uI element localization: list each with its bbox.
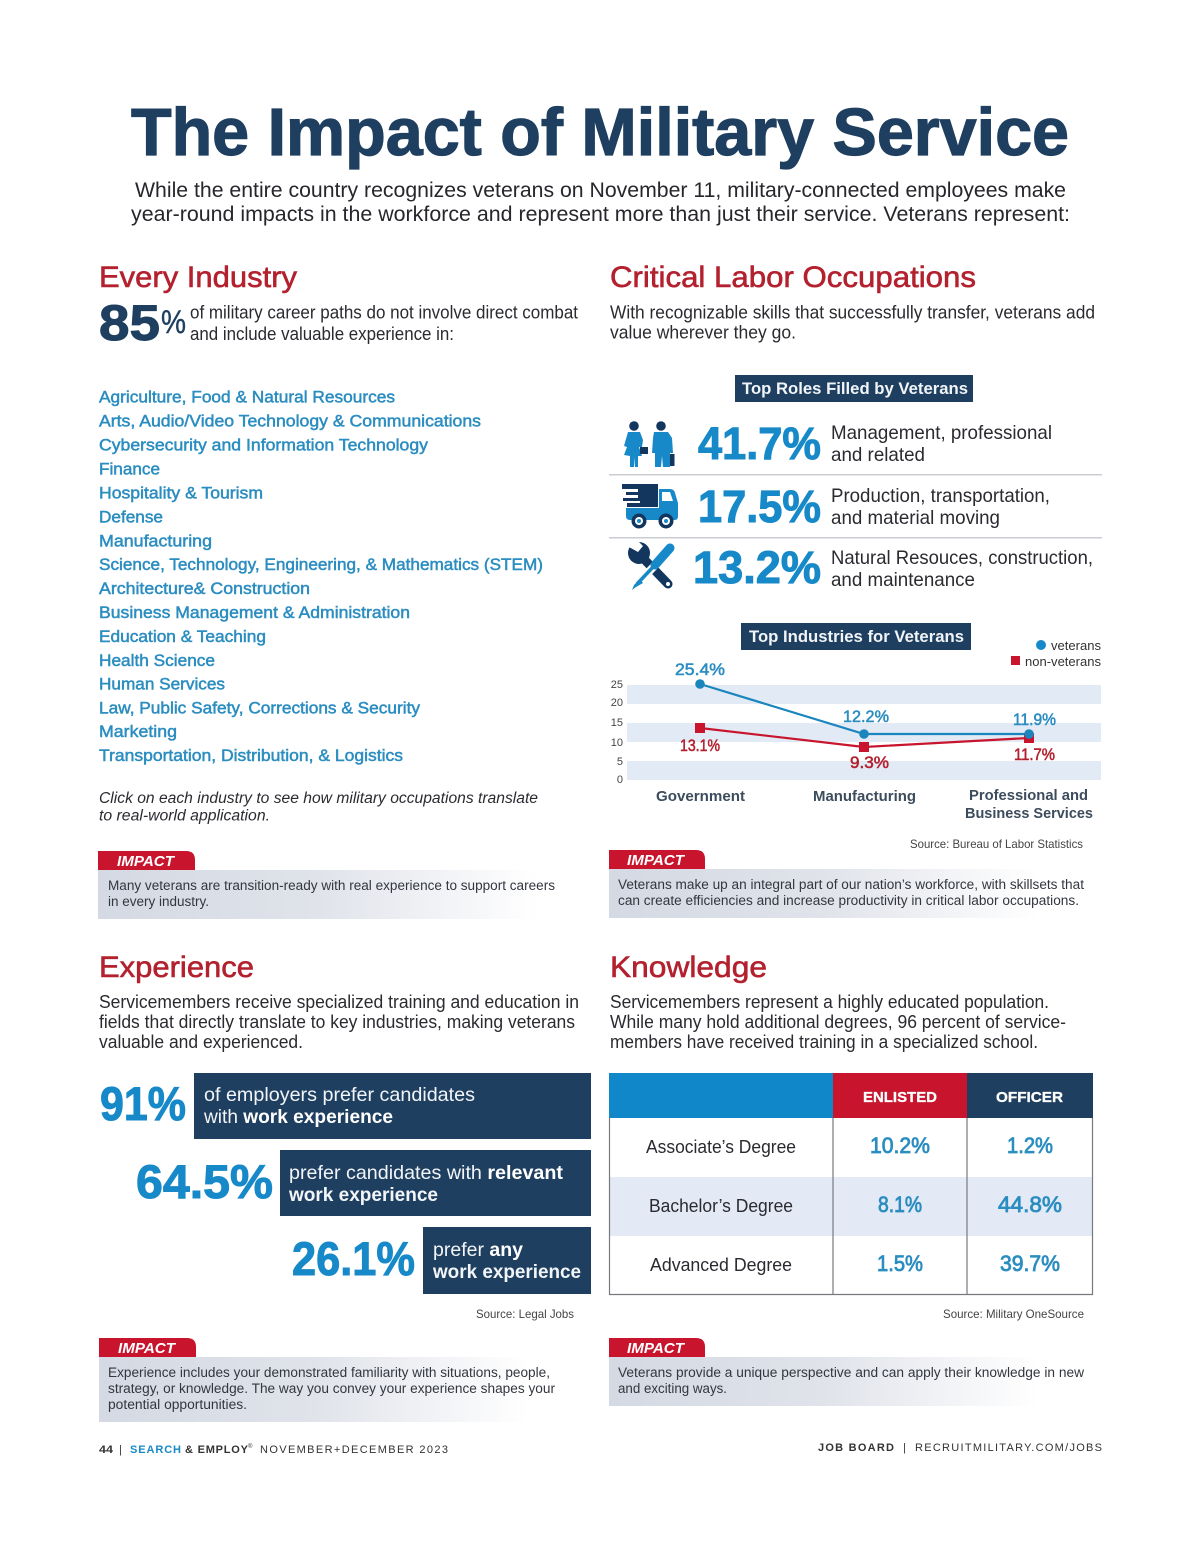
stat: 64.5% [136, 1150, 591, 1216]
intro text: year-round impacts in the workforce and represent more than just their service. Veterans represent: [131, 203, 1070, 226]
table: degrees: Advanced Degree [650, 1255, 792, 1275]
section description: While many hold additional degrees, 96 percent of service- [610, 1012, 1066, 1032]
table: degrees: 8.1% [878, 1192, 922, 1217]
line chart: top industries: 12.2% [843, 708, 889, 726]
value: 17.5%: 17.5% [698, 481, 821, 532]
industry list [99, 388, 543, 765]
table: degrees: 1.2% [1007, 1133, 1053, 1158]
intro text [131, 179, 1070, 226]
role label: and material moving [831, 507, 1000, 529]
industry list: Health Science [99, 651, 215, 670]
panel: knowledge [609, 951, 1093, 1406]
table: degrees [609, 1073, 1093, 1295]
line chart: top industries: 10 [611, 737, 623, 749]
line chart: top industries: Professional and [969, 787, 1088, 804]
industry list: Defense [99, 508, 163, 526]
section description: members have received training in a specialized school. [610, 1032, 1038, 1052]
stat: 91%: 91% [100, 1077, 186, 1130]
table: degrees: 10.2% [870, 1133, 930, 1158]
industry list: Manufacturing [99, 532, 212, 550]
stat description: of military career paths do not involve direct combat [190, 302, 578, 322]
impact callout: critical labor: can create efficiencies and increase productivity in critical labor occupations. [618, 893, 1079, 908]
industry list: Architecture& Construction [99, 579, 310, 598]
industry list: Human Services [99, 674, 225, 694]
line chart: top industries: Business Services [965, 805, 1093, 822]
industry list: Law, Public Safety, Corrections & Security [99, 698, 420, 718]
stat description [190, 302, 578, 344]
industry list: Business Management & Administration [99, 603, 410, 622]
line chart: top industries: 25 [611, 679, 623, 691]
chart legend: veterans [1051, 638, 1101, 653]
impact callout: every industry [98, 851, 555, 919]
role label [831, 547, 1093, 591]
footer: right [818, 1442, 1102, 1454]
footer: left: ® [248, 1443, 253, 1450]
section description [610, 992, 1066, 1052]
footer: left: NOVEMBER+DECEMBER 2023 [260, 1444, 448, 1456]
value: 41.7%: 41.7% [698, 418, 821, 469]
footer: right: RECRUITMILITARY.COM/JOBS [915, 1442, 1102, 1454]
source: bureau of labor statistics: Source: Bureau of Labor Statistics [910, 837, 1083, 851]
heading: critical labor occupations: Critical Labor Occupations [610, 261, 976, 294]
impact callout: critical labor [609, 850, 1084, 918]
impact callout: every industry: Many veterans are transition-ready with real experience to support careers [108, 878, 555, 893]
subheading: top roles [735, 375, 973, 402]
stat: 64.5%: work experience [288, 1184, 438, 1206]
source: legal jobs: Source: Legal Jobs [476, 1307, 574, 1321]
value: 13.2%: 13.2% [693, 542, 821, 593]
section description: Servicemembers represent a highly educated population. [610, 992, 1049, 1012]
impact callout: every industry: IMPACT [117, 853, 176, 870]
table: degrees: 44.8% [998, 1192, 1062, 1217]
line chart: top industries: 0 [617, 774, 623, 786]
panel: critical labor occupations [609, 261, 1102, 918]
stat: 91%: of employers prefer candidates [204, 1084, 475, 1106]
footer: right: JOB BOARD [818, 1442, 894, 1454]
footer: right: | [903, 1442, 906, 1454]
stat: 85 percent [99, 295, 186, 351]
impact callout: critical labor: IMPACT [627, 852, 686, 869]
icon: truck [622, 484, 678, 528]
chart legend: non-veterans [1025, 654, 1101, 669]
line chart: top industries: 5 [617, 756, 623, 768]
line chart: top industries: Manufacturing [813, 788, 916, 805]
line chart: top industries: 9.3% [850, 754, 889, 772]
table: degrees: ENLISTED [863, 1089, 937, 1106]
impact callout: every industry: in every industry. [108, 894, 209, 909]
section description: With recognizable skills that successfully transfer, veterans add [610, 302, 1095, 322]
role row: production [622, 481, 1050, 532]
impact callout: experience: Experience includes your demonstrated familiarity with situations, people, [108, 1365, 550, 1380]
industry list: Education & Teaching [99, 627, 266, 646]
impact callout: experience: strategy, or knowledge. The way you convey your experience shapes your [108, 1381, 556, 1396]
source: military onesource: Source: Military OneSource [943, 1307, 1084, 1321]
line chart: top industries: 25.4% [675, 661, 725, 679]
footer: left: | [119, 1444, 122, 1456]
heading: experience: Experience [99, 951, 254, 984]
role label: Production, transportation, [831, 485, 1050, 507]
section description: valuable and experienced. [99, 1032, 303, 1052]
intro text: While the entire country recognizes veterans on November 11, military-connected employees make [135, 179, 1066, 202]
role row: management [624, 418, 1052, 469]
line chart: top industries: 13.1% [680, 737, 720, 755]
click note: to real-world application. [99, 808, 270, 824]
impact callout: experience: IMPACT [118, 1340, 177, 1357]
stat: 26.1% [292, 1227, 591, 1294]
subheading: top industries: Top Industries for Veterans [749, 627, 964, 646]
line chart: top industries: 15 [611, 717, 623, 729]
section description [610, 302, 1095, 342]
industry list: Transportation, Distribution, & Logistics [99, 746, 403, 765]
impact callout: knowledge: Veterans provide a unique perspective and can apply their knowledge in new [618, 1365, 1084, 1380]
stat: 26.1%: prefer any [433, 1239, 523, 1261]
line chart: top industries [611, 661, 1101, 822]
section description: Servicemembers receive specialized training and education in [99, 992, 579, 1012]
industry list: Marketing [99, 722, 177, 741]
line chart: top industries: 11.9% [1013, 711, 1056, 729]
section description: fields that directly translate to key industries, making veterans [99, 1012, 575, 1032]
stat: 91%: with work experience [203, 1106, 393, 1128]
footer: left: 44 [99, 1444, 114, 1456]
table: degrees: OFFICER [996, 1089, 1063, 1106]
stat: 85 percent: 85 [99, 295, 160, 351]
line chart: top industries: 20 [611, 697, 623, 709]
section description: value wherever they go. [610, 322, 796, 342]
line chart: top industries: 11.7% [1014, 746, 1055, 764]
click note: Click on each industry to see how military occupations translate [99, 790, 538, 807]
line chart: top industries: Government [656, 788, 745, 805]
impact callout: knowledge [609, 1338, 1084, 1406]
subheading: top roles: Top Roles Filled by Veterans [742, 379, 968, 398]
stat: 64.5%: 64.5% [136, 1155, 273, 1208]
impact callout: experience: potential opportunities. [108, 1397, 247, 1412]
heading: knowledge: Knowledge [610, 951, 767, 984]
industry list: Finance [99, 460, 160, 478]
panel: experience [99, 951, 591, 1422]
industry list: Arts, Audio/Video Technology & Communications [99, 412, 481, 430]
stat: 85 percent: % [161, 304, 186, 340]
chart legend [1011, 638, 1101, 669]
role row: natural resources [625, 539, 1093, 593]
stat: 91% [100, 1073, 591, 1139]
impact callout: critical labor: Veterans make up an integral part of our nation’s workforce, with skillsets that [618, 877, 1084, 892]
title: The Impact of Military Service [131, 95, 1069, 170]
impact callout: experience [99, 1338, 556, 1422]
role label: and related [831, 444, 925, 466]
stat: 64.5%: prefer candidates with relevant [289, 1162, 564, 1184]
role label [831, 422, 1052, 466]
industry list: Agriculture, Food & Natural Resources [99, 388, 395, 406]
icon: business people [624, 421, 674, 467]
industry list: Hospitality & Tourism [99, 484, 263, 502]
stat: 26.1%: 26.1% [292, 1232, 415, 1285]
icon: wrench and screwdriver [625, 539, 670, 590]
footer: left: SEARCH [130, 1444, 181, 1456]
role label: Management, professional [831, 422, 1052, 444]
impact callout: knowledge: and exciting ways. [618, 1381, 727, 1396]
panel: every industry [98, 261, 578, 919]
role label: Natural Resouces, construction, [831, 547, 1093, 569]
footer: left: & EMPLOY [185, 1444, 249, 1456]
stat: 26.1%: work experience [432, 1261, 581, 1283]
subheading: top industries [741, 623, 971, 650]
click note [99, 790, 538, 824]
table: degrees: 39.7% [1000, 1251, 1060, 1276]
table: degrees: Bachelor’s Degree [649, 1196, 793, 1216]
table: degrees: 1.5% [877, 1251, 923, 1276]
footer: left [99, 1443, 448, 1456]
section description [99, 992, 579, 1052]
role label [831, 485, 1050, 529]
table: degrees: Associate’s Degree [646, 1137, 796, 1157]
industry list: Science, Technology, Engineering, & Mathematics (STEM) [99, 555, 543, 574]
role label: and maintenance [831, 569, 975, 591]
industry list: Cybersecurity and Information Technology [99, 436, 429, 454]
heading: every industry: Every Industry [99, 261, 297, 294]
impact callout: knowledge: IMPACT [627, 1340, 686, 1357]
stat description: and include valuable experience in: [190, 324, 454, 344]
